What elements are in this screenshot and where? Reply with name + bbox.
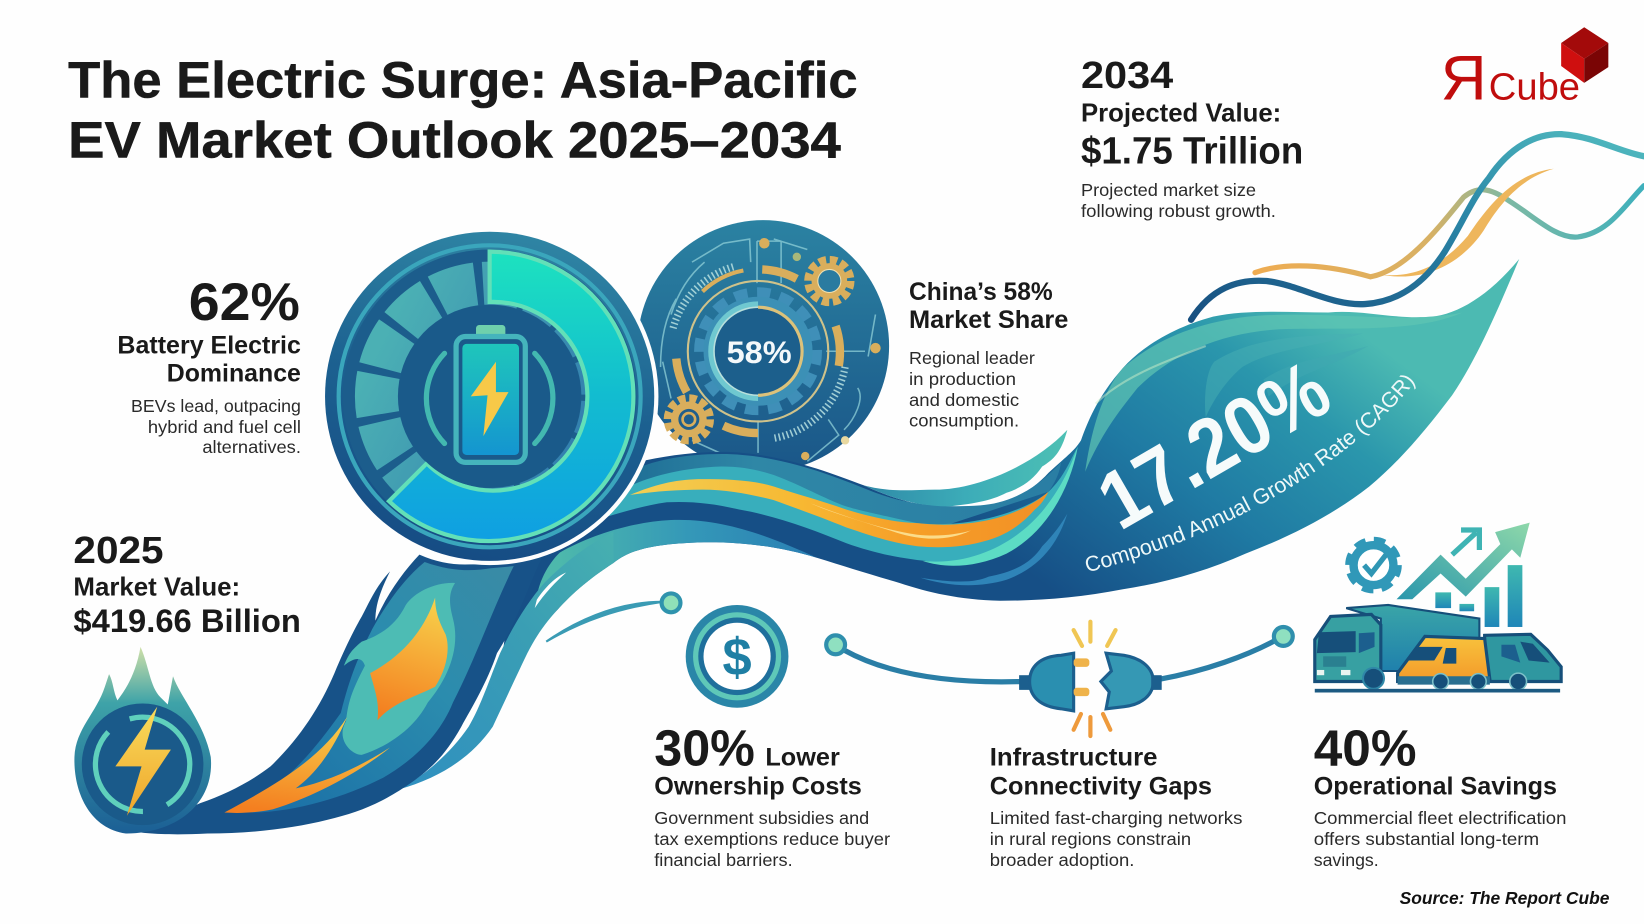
icon: gold gear bottom	[668, 398, 710, 440]
text: 58%: 58%	[727, 335, 792, 370]
node: left cable end	[826, 635, 845, 654]
source note: Source: The Report Cube	[1400, 888, 1609, 908]
orange van	[1398, 636, 1490, 689]
text: 62% battery electric: Dominance	[167, 360, 301, 388]
sparks	[1074, 622, 1116, 736]
text: China market share: China’s 58%	[909, 278, 1053, 306]
logo: RCube: Cube	[1489, 66, 1580, 108]
text: China market share: Market Share	[909, 306, 1068, 334]
text: infrastructure gaps: in rural regions constrain	[990, 829, 1191, 849]
text: 2034 projected value: 2034	[1081, 54, 1173, 96]
logo: RCube: Я	[1441, 44, 1487, 114]
circle: China 58% gear disc	[637, 220, 889, 472]
text: 40% operational savings: Operational Savings	[1314, 773, 1557, 801]
text: 30% lower ownership costs: financial barriers.	[654, 850, 793, 870]
text: China market share: consumption.	[909, 411, 1019, 431]
orange flame	[370, 598, 448, 720]
truck cargo	[1346, 605, 1479, 671]
circuit lines	[661, 239, 875, 461]
text: compound annual growth rate: Compound Annual Growth Rate (CAGR)	[1086, 375, 1416, 571]
icon: truck and vans	[1315, 605, 1561, 693]
text: 2025 market value	[73, 529, 301, 639]
title	[68, 51, 858, 168]
text: 30% lower ownership costs	[654, 718, 890, 870]
text: 40% operational savings: savings.	[1314, 850, 1379, 870]
icon: battery gauge disc	[321, 228, 658, 565]
central gear	[700, 294, 816, 409]
text: 62% battery electric	[117, 274, 301, 457]
light teal band	[606, 447, 1078, 563]
text: 62% battery electric: Battery Electric	[117, 331, 301, 359]
icon: dollar coin: $	[722, 629, 752, 687]
text: 40% operational savings: 40%	[1314, 718, 1416, 776]
central ribbon layers	[537, 430, 1078, 619]
text: 62% battery electric: BEVs lead, outpacing	[131, 396, 301, 416]
wave highlights	[1085, 312, 1463, 472]
icon: gear check	[1350, 542, 1397, 588]
wavy lines: top right	[1191, 134, 1644, 320]
truck cab	[1315, 614, 1381, 681]
inner teal leaf	[343, 583, 455, 755]
growth wave: CAGR ribbon	[503, 259, 1519, 655]
text: infrastructure gaps: broader adoption.	[990, 850, 1134, 870]
thin blade swoosh	[398, 532, 663, 789]
text: 2025 market value: 2025	[73, 529, 164, 571]
text: China market share	[909, 278, 1068, 431]
text: 2025 market value: Market Value:	[73, 572, 240, 602]
chart: growth bars and arrow	[1397, 523, 1530, 627]
text: 2034 projected value: Projected Value:	[1081, 98, 1281, 128]
text: 62% battery electric: alternatives.	[202, 437, 301, 457]
node: swoosh connector end	[662, 593, 680, 612]
text: 40% operational savings: Commercial fleet electrification	[1314, 808, 1566, 828]
text: 30% lower ownership costs: Lower	[765, 743, 840, 771]
icon: broken plug	[1019, 622, 1162, 736]
tick marks	[673, 266, 845, 438]
text: 2034 projected value: following robust growth.	[1081, 201, 1276, 221]
logo: RCube	[1441, 27, 1608, 114]
icon: gold gear top	[808, 260, 850, 302]
text: 2034 projected value	[1081, 54, 1303, 221]
lower orange streak	[224, 717, 390, 813]
connector: plug cable	[844, 641, 1275, 682]
text: 2034 projected value: Projected market size	[1081, 180, 1256, 200]
text: China market share: in production	[909, 369, 1016, 389]
text: 40% operational savings: offers substantial long-term	[1314, 829, 1539, 849]
upper steel band	[629, 454, 1061, 535]
arm	[864, 430, 1067, 506]
gold arc dashes	[676, 269, 840, 433]
text: 30% lower ownership costs: 30%	[654, 718, 755, 776]
lower blue sliver	[921, 514, 1067, 585]
node: right cable end	[1274, 627, 1293, 646]
text: 2034 projected value: $1.75 Trillion	[1081, 130, 1303, 172]
title: The Electric Surge: Asia-Pacific	[68, 51, 858, 109]
mint crescent	[923, 447, 1078, 566]
text: infrastructure gaps: Connectivity Gaps	[990, 773, 1212, 801]
icon: flame bolt bulb	[74, 647, 211, 834]
bright progress arc	[389, 252, 633, 541]
lower blue band	[537, 520, 817, 619]
orange ribbon	[630, 479, 1048, 547]
teal van	[1485, 634, 1561, 690]
ground line	[1315, 689, 1560, 693]
icon: dollar coin	[686, 605, 788, 708]
text: 2025 market value: $419.66 Billion	[73, 603, 301, 639]
text: 30% lower ownership costs: Government subsidies and	[654, 808, 869, 828]
title: EV Market Outlook 2025–2034	[68, 110, 841, 168]
text: 17.20% CAGR: 17.20%	[1083, 344, 1345, 547]
text: infrastructure gaps: Infrastructure	[990, 743, 1158, 771]
text: China market share: and domestic	[909, 390, 1019, 410]
text: 30% lower ownership costs: tax exemptions reduce buyer	[654, 829, 890, 849]
gauge segments	[376, 283, 603, 510]
text: 40% operational savings	[1314, 718, 1566, 870]
battery arcs	[426, 353, 553, 443]
text: infrastructure gaps	[990, 743, 1243, 870]
flame swoosh	[125, 554, 544, 834]
text: 62% battery electric: hybrid and fuel cell	[148, 417, 301, 437]
battery icon	[456, 325, 525, 462]
text: 30% lower ownership costs: Ownership Costs	[654, 773, 862, 801]
text: 62% battery electric: 62%	[189, 274, 300, 332]
text: China market share: Regional leader	[909, 348, 1035, 368]
text: infrastructure gaps: Limited fast-charging networks	[990, 808, 1243, 828]
pale ribbon highlight	[810, 503, 971, 539]
